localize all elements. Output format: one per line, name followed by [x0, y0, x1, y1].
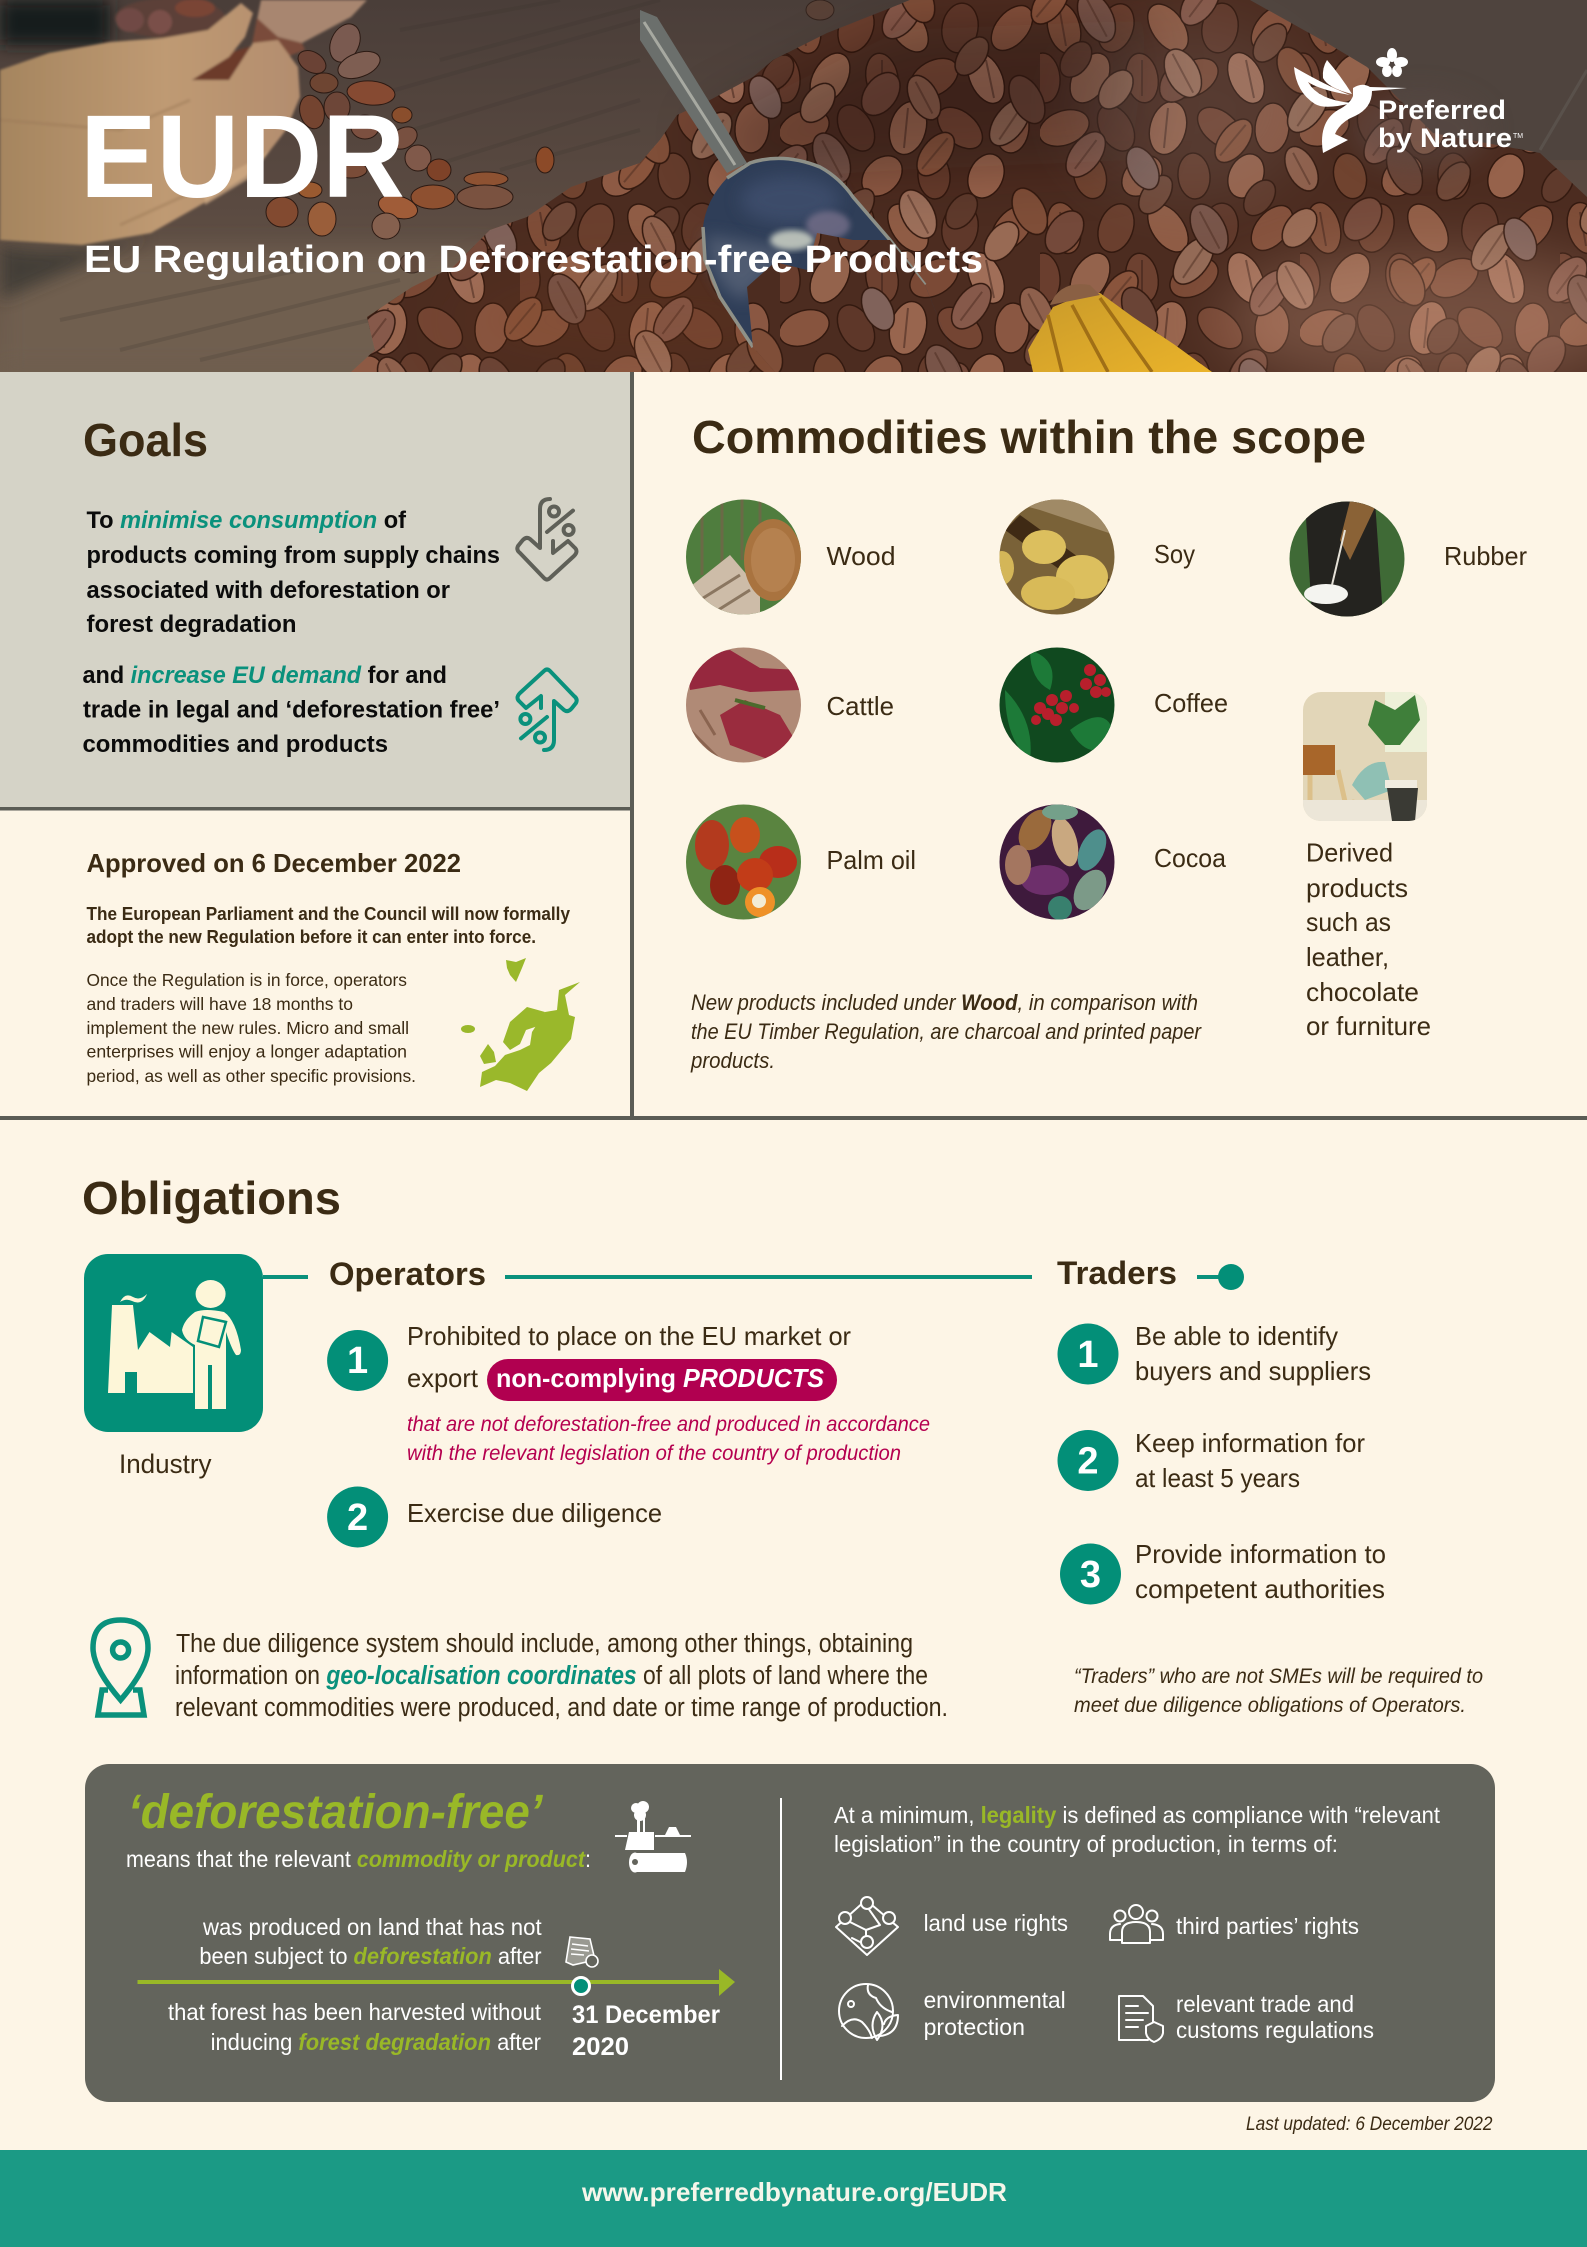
- image: cocoa: [999, 804, 1115, 920]
- icon: tree stump and log: [615, 1801, 691, 1872]
- bean pile: [351, 0, 1587, 372]
- heading: commodities within the scope: Commodities within the scope: [692, 411, 1366, 463]
- qualifier text: with the relevant legislation of the country of production: [407, 1442, 901, 1465]
- text: third parties rights: third parties’ rights: [1176, 1913, 1359, 1939]
- paragraph: period, as well as other specific provisions.: [86, 1066, 416, 1086]
- operators obligation 2: [327, 1486, 662, 1548]
- text block: increase EU demand: and increase EU demand for and: [82, 662, 447, 689]
- text block: increase EU demand: trade in legal and ‘deforestation free’: [83, 696, 500, 724]
- connector: traders end dot: [1197, 1264, 1244, 1290]
- text: environmental protection: protection: [924, 2014, 1025, 2040]
- icon: percent arrow down: [517, 499, 576, 580]
- text: legality definition: legislation” in the country of production, in terms of:: [834, 1831, 1338, 1857]
- heading: approved date: Approved on 6 December 2022: [86, 848, 461, 878]
- text block: due diligence system: information on geo-localisation coordinates of all plots of land where the: [175, 1662, 928, 1690]
- text block: minimise consumption: associated with deforestation or: [86, 577, 450, 604]
- text: derived products: leather,: [1306, 942, 1389, 972]
- logo: Preferred by Nature: [1294, 48, 1523, 153]
- badge 1: [1058, 1324, 1118, 1384]
- obligation text: Provide information to: [1135, 1539, 1386, 1569]
- bold statement: [86, 904, 570, 947]
- logo: Preferred by Nature: TM: [1513, 133, 1523, 140]
- date: 31 December 2020: 31 December: [572, 2001, 720, 2029]
- qualifier text: that are not deforestation-free and produced in accordance: [407, 1413, 930, 1436]
- subtitle: EU Regulation on Deforestation-free Products: [84, 239, 983, 281]
- obligation text: Be able to identify: [1135, 1321, 1338, 1351]
- note: new wood products: products.: [690, 1048, 775, 1073]
- text: means that: means that the relevant commodity or product:: [126, 1846, 591, 1872]
- obligation text: [1135, 1428, 1365, 1493]
- text block: minimise consumption: To minimise consumption of: [86, 507, 407, 534]
- text block: increase EU demand: commodities and products: [82, 731, 388, 758]
- text: derived products: or furniture: [1306, 1011, 1431, 1041]
- text: derived products: chocolate: [1306, 977, 1419, 1007]
- bold statement: adopt the new Regulation before it can enter into force.: [86, 927, 536, 947]
- icon: location pin: [93, 1620, 148, 1715]
- connector: operators to traders: [505, 1275, 1032, 1279]
- text: produced on land: been subject to deforestation after: [199, 1943, 542, 1969]
- pill: non-complying products: [487, 1359, 837, 1401]
- text block: minimise consumption: forest degradation: [86, 611, 296, 638]
- note: new wood products: the EU Timber Regulation, are charcoal and printed paper: [691, 1019, 1203, 1044]
- logo text: Preferred: [1378, 95, 1506, 125]
- text: derived products: such as: [1306, 907, 1391, 937]
- text: environmental protection: environmental: [924, 1987, 1066, 2013]
- icon: people: [1110, 1905, 1163, 1943]
- traders obligation 1: [1058, 1321, 1371, 1386]
- image: cattle: [686, 647, 802, 763]
- icon: industry tile: [84, 1254, 263, 1432]
- text block: due diligence system: The due diligence system should include, among other things, obtaining: [176, 1630, 913, 1658]
- label: industry: Industry: [119, 1449, 212, 1479]
- badge 3: [1060, 1544, 1121, 1604]
- badge 3: 3: [1080, 1554, 1101, 1596]
- text: derived products: products: [1306, 873, 1408, 903]
- paragraph: [86, 970, 416, 1086]
- label: soy: Soy: [1154, 539, 1195, 569]
- badge 1: 1: [347, 1340, 368, 1382]
- text block: minimise consumption: [86, 507, 500, 638]
- obligation text: at least 5 years: [1135, 1463, 1300, 1493]
- paragraph: Once the Regulation is in force, operators: [86, 970, 407, 990]
- last updated note: Last updated: 6 December 2022: [1246, 2114, 1493, 2135]
- footer url: www.preferredbynature.org/EUDR: [581, 2177, 1007, 2207]
- heading: obligations: Obligations: [82, 1172, 341, 1224]
- text block: due diligence system: relevant commodities were produced, and date or time range of production.: [175, 1694, 948, 1722]
- note: new wood products: [690, 990, 1203, 1073]
- label: cocoa: Cocoa: [1154, 843, 1227, 873]
- label: cattle: Cattle: [826, 691, 894, 721]
- pill: non-complying products: non-complying PRODUCTS: [496, 1363, 825, 1393]
- text: trade and customs: customs regulations: [1176, 2017, 1374, 2043]
- panel: goals: [0, 372, 630, 807]
- bold statement: The European Parliament and the Council will now formally: [86, 904, 570, 924]
- connector: industry to operators: [263, 1275, 308, 1279]
- panel: definitions: [85, 1764, 1495, 2102]
- obligation text: Keep information for: [1135, 1428, 1365, 1458]
- icon: flower: [1376, 48, 1408, 77]
- title: EUDR: EUDR: [80, 91, 405, 223]
- obligation text: [1135, 1539, 1386, 1604]
- text: environmental protection: [924, 1987, 1066, 2040]
- text: legality definition: At a minimum, legality is defined as compliance with “relevant: [834, 1802, 1441, 1828]
- heading: operators: Operators: [329, 1256, 486, 1292]
- icon: globe and leaf: [839, 1984, 898, 2040]
- text: derived products: [1306, 838, 1431, 1041]
- text block: minimise consumption: products coming from supply chains: [86, 542, 500, 569]
- date: 31 December 2020: [572, 2001, 720, 2061]
- image: rubber: [1289, 501, 1405, 617]
- label: coffee: Coffee: [1154, 688, 1228, 718]
- hero photo: cocoa beans with scoop: [0, 0, 1587, 390]
- paragraph: enterprises will enjoy a longer adaptation: [86, 1042, 407, 1062]
- image: wood: [686, 499, 802, 615]
- badge 2: [1058, 1430, 1118, 1491]
- text: forest harvested: inducing forest degradation after: [211, 2029, 541, 2055]
- text: legality definition: [834, 1802, 1441, 1857]
- obligation text: Prohibited to place on the EU market or: [407, 1321, 851, 1351]
- text block: due diligence system: [175, 1630, 948, 1722]
- image: coffee: [999, 647, 1115, 763]
- text: forest harvested: [168, 1999, 542, 2055]
- image: palm oil: [686, 804, 802, 920]
- icon: regulations document: [1119, 1996, 1163, 2042]
- operators obligation 1: [327, 1321, 930, 1465]
- scoop: [640, 10, 960, 372]
- label: rubber: Rubber: [1444, 541, 1527, 571]
- badge 2: [327, 1486, 388, 1548]
- badge 2: 2: [1077, 1440, 1099, 1482]
- image: soy: [990, 499, 1115, 615]
- obligation text: [1135, 1321, 1371, 1386]
- text block: increase EU demand: [82, 662, 500, 758]
- loose beans: [266, 0, 834, 273]
- note: new wood products: New products included under Wood, in comparison with: [691, 990, 1198, 1015]
- timeline marker: [572, 1978, 590, 1994]
- icon: document: [566, 1937, 598, 1967]
- label: wood: Wood: [826, 541, 896, 571]
- qualifier text: [407, 1413, 930, 1465]
- paragraph: and traders will have 18 months to: [86, 994, 353, 1014]
- footer band: [0, 2150, 1587, 2247]
- obligation text: Exercise due diligence: [407, 1498, 662, 1528]
- map: Europe: [461, 958, 580, 1091]
- hand holding beans: [0, 0, 367, 245]
- icon: land use map: [836, 1897, 898, 1955]
- date: 31 December 2020: 2020: [572, 2033, 629, 2061]
- text: forest harvested: that forest has been harvested without: [168, 1999, 542, 2025]
- text: derived products: Derived: [1306, 838, 1393, 868]
- yellow cocoa pod: [1028, 284, 1212, 372]
- badge 2: 2: [347, 1497, 368, 1539]
- text: trade and customs: relevant trade and: [1176, 1991, 1354, 2017]
- traders obligation 3: [1060, 1539, 1386, 1604]
- obligation text: competent authorities: [1135, 1574, 1385, 1604]
- text: land use rights: land use rights: [924, 1910, 1068, 1936]
- note: traders who are not SMEs: [1074, 1665, 1483, 1717]
- heading: traders: Traders: [1057, 1255, 1177, 1291]
- heading: deforestation-free: ‘deforestation-free’: [128, 1786, 543, 1839]
- text: produced on land: was produced on land that has not: [202, 1914, 542, 1940]
- image: derived products: [1303, 692, 1427, 821]
- traders obligation 2: [1058, 1428, 1365, 1493]
- heading: Goals: Goals: [83, 414, 208, 466]
- label: palm oil: Palm oil: [826, 845, 916, 875]
- text: trade and customs: [1176, 1991, 1374, 2043]
- paragraph: implement the new rules. Micro and small: [86, 1018, 409, 1038]
- operators obligation 1: export: [407, 1363, 479, 1393]
- text: produced on land: [199, 1914, 542, 1969]
- obligation text: buyers and suppliers: [1135, 1356, 1371, 1386]
- panel: commodities: [686, 411, 1527, 1073]
- panel: approved: [86, 848, 580, 1091]
- note: traders who are not SMEs: meet due diligence obligations of Operators.: [1074, 1694, 1466, 1717]
- icon: percent arrow up: [518, 670, 577, 750]
- note: traders who are not SMEs: “Traders” who are not SMEs will be required to: [1074, 1665, 1483, 1688]
- logo: Preferred by Nature: by Nature: [1378, 123, 1512, 153]
- badge 1: [327, 1330, 388, 1391]
- timeline arrow: [138, 1969, 735, 1996]
- badge 1: 1: [1077, 1334, 1099, 1376]
- icon: hummingbird: [1294, 60, 1407, 153]
